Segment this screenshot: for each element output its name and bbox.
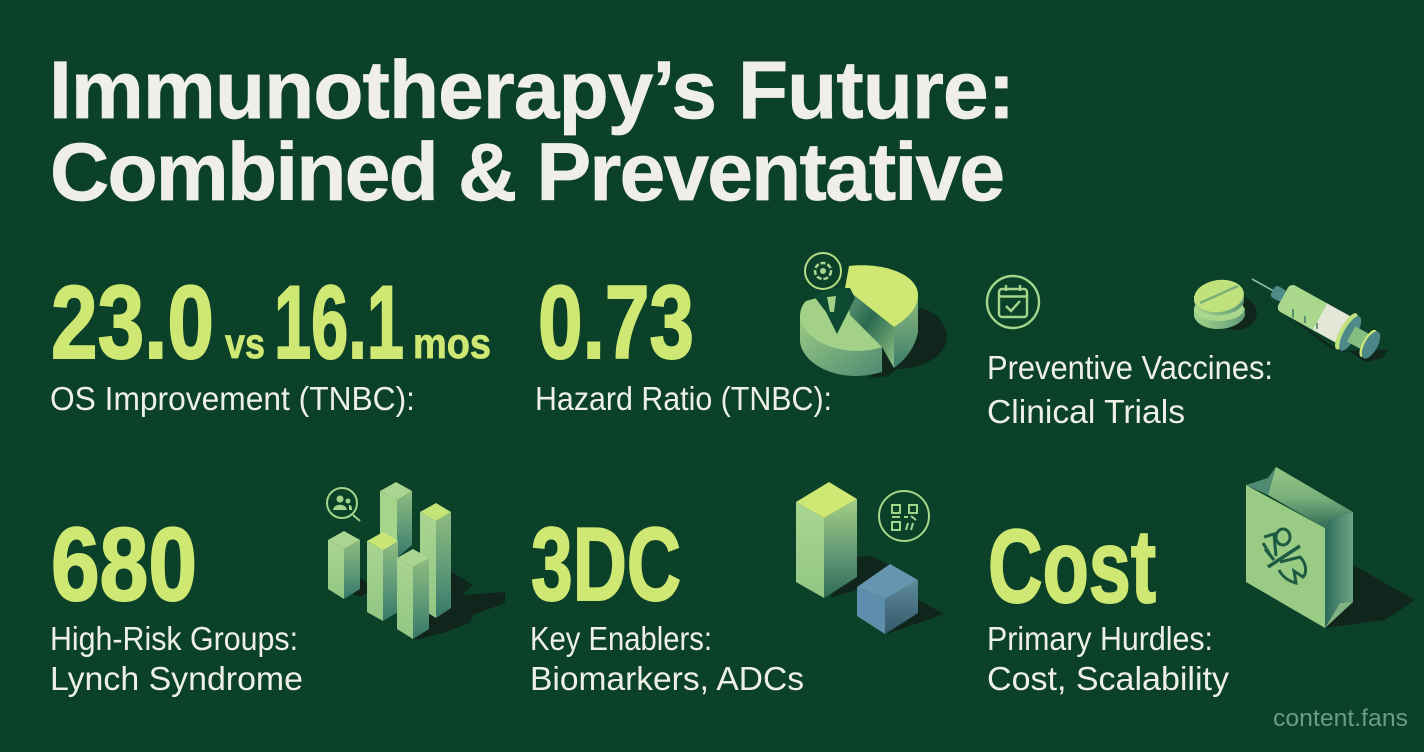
stat: preventive vaccines [987, 349, 1273, 430]
stat: hazard ratio [535, 265, 832, 417]
icon: people search badge [327, 488, 360, 521]
icon: shopping bag with crossed-out money [1246, 467, 1415, 628]
stat: overall survival improvement: OS Improvement (TNBC): [50, 380, 415, 417]
stat: hazard ratio: 0.73 [538, 265, 694, 381]
stat: high-risk groups: High-Risk Groups: [50, 620, 298, 657]
stat: key enablers [530, 507, 804, 697]
stat: high-risk groups: 680 [51, 507, 197, 623]
icon: calendar check badge [987, 276, 1039, 328]
stat: overall survival improvement [50, 265, 491, 417]
stat: high-risk groups [50, 507, 303, 697]
stat: overall survival improvement: 16.1 [274, 265, 404, 381]
stat: primary hurdles [987, 509, 1230, 697]
icon: molecular QR badge [879, 491, 929, 541]
stat: overall survival improvement: vs [225, 320, 265, 368]
icon: isometric bar chart [328, 482, 505, 640]
stat: high-risk groups: Lynch Syndrome [50, 660, 303, 697]
stat: hazard ratio: Hazard Ratio (TNBC): [535, 380, 832, 417]
title [49, 45, 1015, 218]
icon: isometric boxes [796, 482, 944, 634]
stat: primary hurdles: Cost, Scalability [987, 660, 1230, 697]
stat: preventive vaccines: Clinical Trials [987, 393, 1185, 430]
icon: syringe [1242, 261, 1388, 366]
icon: pie chart with magnifier [800, 253, 947, 378]
stat: overall survival improvement: 23.0 [51, 265, 214, 381]
title: Combined & Preventative [50, 127, 1005, 218]
stat: key enablers: Biomarkers, ADCs [530, 660, 804, 697]
stat: preventive vaccines: Preventive Vaccines: [987, 349, 1273, 386]
stat: primary hurdles: Cost [988, 509, 1156, 625]
stat: key enablers: 3DC [531, 507, 681, 623]
stat: key enablers: Key Enablers: [530, 620, 712, 657]
watermark: content.fans [1273, 705, 1408, 732]
stat: primary hurdles: Primary Hurdles: [987, 620, 1213, 657]
title: Immunotherapy’s Future: [49, 45, 1015, 136]
icon: stacked pills [1192, 277, 1257, 330]
stat: overall survival improvement: mos [413, 320, 491, 368]
